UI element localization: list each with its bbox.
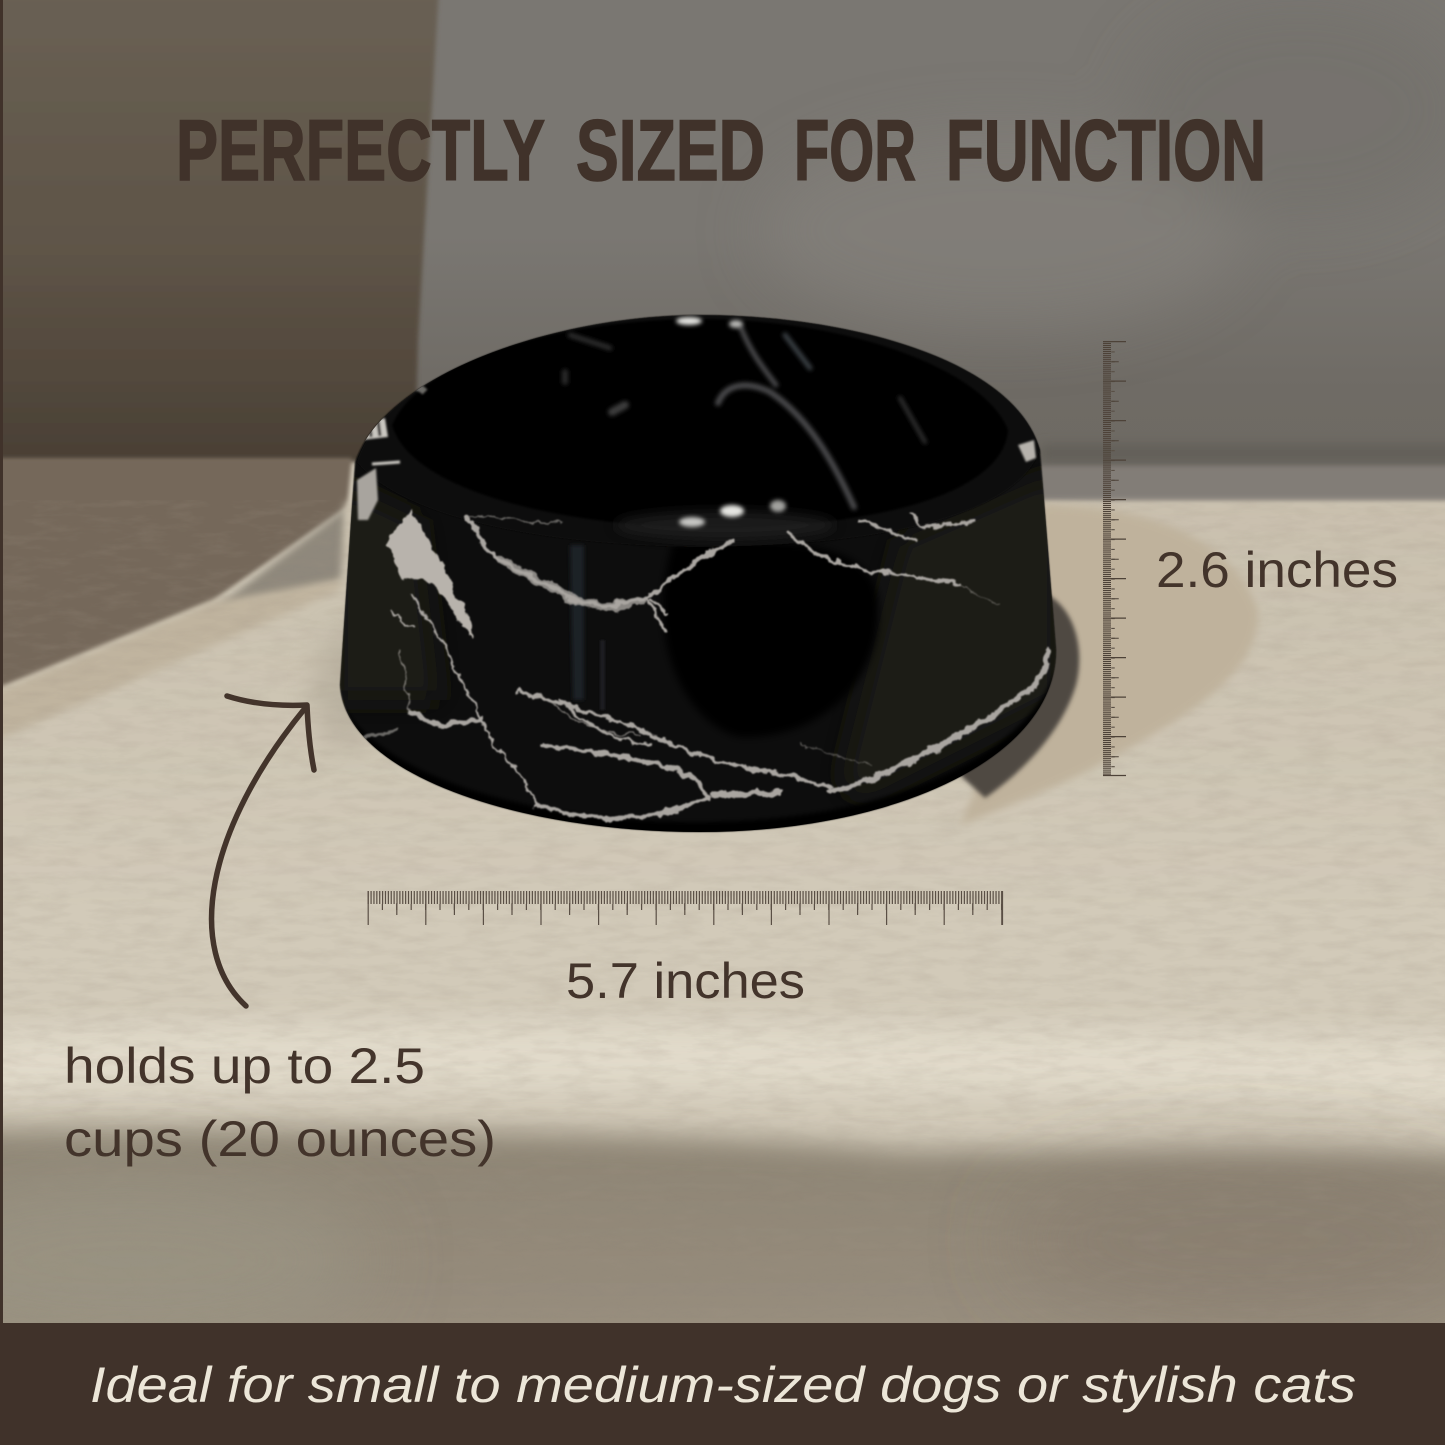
title — [176, 103, 1266, 199]
footer band — [0, 1323, 1445, 1445]
title: SIZED — [576, 103, 765, 199]
bowl: marble patch on left body — [387, 510, 474, 640]
floor: wide lit band — [0, 1024, 1445, 1105]
bowl: top rim face — [357, 315, 1040, 547]
ledge: cooler left and warmer right tones — [0, 1160, 1445, 1350]
footer caption: Ideal for small to medium-sized dogs or stylish cats — [90, 1357, 1356, 1413]
arrow: capacity pointer — [212, 696, 314, 1006]
label: width: 5.7 inches — [566, 953, 805, 1009]
vein: left edge — [362, 730, 395, 738]
marble bowl photo — [335, 315, 1060, 840]
callout: capacity — [64, 1038, 496, 1167]
bowl: pale marble veins — [362, 514, 1048, 819]
bowl: blue-black vertical reflection — [570, 545, 584, 700]
ledge: dark shadow wedge on left — [0, 458, 352, 700]
bowl: interior gloss highlights — [676, 317, 786, 527]
bowl: black reflection dome — [663, 542, 879, 737]
bowl: glossy base edge — [340, 670, 1056, 840]
bowl: rim left vein block — [357, 386, 425, 520]
vein: main front vein — [467, 517, 732, 606]
title: FUNCTION — [946, 103, 1266, 199]
bowl: right rim chip — [1018, 440, 1036, 462]
bowl: outer body — [340, 315, 1056, 832]
floor: main lit surface — [3, 498, 1445, 746]
vein: lower tangle — [519, 691, 831, 787]
contact shadow: dark crescent at bowl base — [960, 595, 1079, 798]
ruler: width — [368, 891, 1003, 925]
wall: dark band above the ledge — [1043, 446, 1445, 460]
bowl: inner cavity — [392, 319, 1008, 528]
surface texture — [3, 586, 1445, 1124]
contact shadow: halo left of bowl — [314, 635, 363, 748]
callout: capacity: cups (20 ounces) — [64, 1111, 496, 1167]
wall: right grey panel — [400, 0, 1445, 490]
left edge strip — [0, 0, 3, 1323]
vein: hairline extension — [958, 584, 1000, 605]
ledge: grey strip behind bowl, right side — [1030, 466, 1445, 502]
title: FOR — [794, 103, 916, 199]
bowl: interior floor sheen — [615, 511, 835, 539]
floor: warm edge of the wedge — [3, 577, 341, 739]
ledge: grey shaded wedge beside bowl — [222, 510, 347, 603]
vein: right body vein — [788, 532, 958, 584]
floor: tan shadow to the right of bowl — [960, 505, 1258, 825]
wall: left brown panel — [0, 0, 440, 462]
vein: right band around base — [831, 651, 1048, 792]
vein: rim cracks — [859, 519, 916, 541]
wall: lighter highlight patches — [870, 262, 1130, 304]
ruler: height — [1103, 341, 1126, 776]
ledge: shaded front face — [3, 1113, 1445, 1323]
label: height: 2.6 inches — [1156, 542, 1398, 598]
callout: capacity: holds up to 2.5 — [64, 1038, 425, 1094]
bowl: soft tones on body — [335, 470, 1060, 800]
title: PERFECTLY — [176, 103, 545, 199]
bowl: dim interior veins — [565, 328, 925, 507]
bowl: secondary reflection — [600, 640, 605, 710]
